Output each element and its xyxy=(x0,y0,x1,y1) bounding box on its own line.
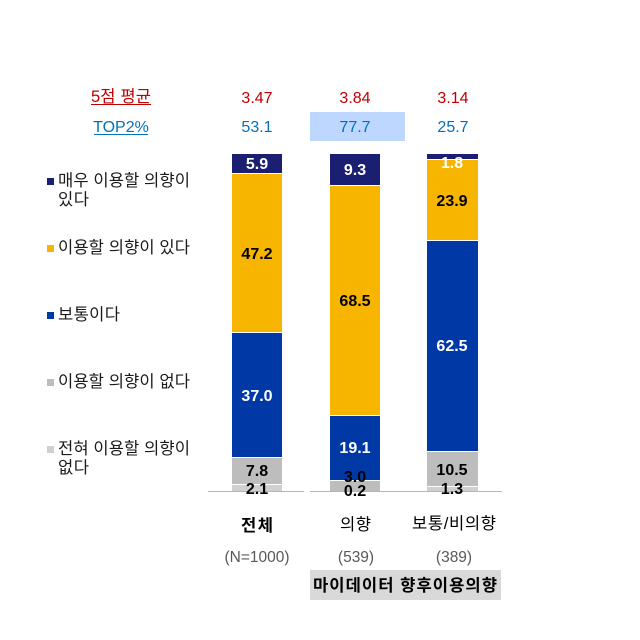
stacked bar: neutral/no intent: 1.8 xyxy=(441,155,463,172)
sample sizes xyxy=(224,549,472,566)
stacked bar: intent xyxy=(330,154,380,500)
category labels: 전체 xyxy=(241,516,273,535)
row: 5-point average xyxy=(91,87,469,107)
legend item: strongly intend: 있다 xyxy=(58,190,89,209)
stacked bar: overall: 47.2 xyxy=(241,246,273,263)
legend item: do not intend: 이용할 의향이 없다 xyxy=(58,372,190,391)
stacked bar: overall xyxy=(232,154,282,498)
stacked bar: intent: 0.2 xyxy=(344,483,366,500)
legend xyxy=(47,171,190,477)
label: 5-point average: 5점 평균 xyxy=(91,87,151,106)
stacked bar: neutral/no intent xyxy=(427,154,478,498)
legend item: strongly intend: 매우 이용할 의향이 xyxy=(58,171,190,190)
stacked bar: overall: 5.9 xyxy=(246,156,268,173)
value: overall average: 3.47 xyxy=(241,90,273,107)
row: TOP2% xyxy=(93,112,469,141)
stacked bar: intent: 3.0 xyxy=(344,469,366,486)
value: overall TOP2: 53.1 xyxy=(241,119,273,136)
label: TOP2%: TOP2% xyxy=(93,119,149,136)
sample sizes: (N=1000) xyxy=(224,549,290,566)
legend item: neutral: 보통이다 xyxy=(58,305,120,324)
stacked bar: neutral/no intent: 62.5 xyxy=(436,338,468,355)
category labels xyxy=(241,514,496,535)
value: intent average: 3.84 xyxy=(339,90,371,107)
legend item: not at all: 없다 xyxy=(58,458,89,477)
legend item: not at all: 전혀 이용할 의향이 xyxy=(58,439,190,458)
legend item: strongly intend xyxy=(47,171,190,209)
stacked bar: neutral/no intent: 1.3 xyxy=(441,481,463,498)
value: neutral/no-intent TOP2: 25.7 xyxy=(437,119,469,136)
stacked bar: neutral/no intent: 10.5 xyxy=(436,462,468,479)
stacked bar: neutral/no intent: 23.9 xyxy=(436,193,468,210)
sample sizes: (539) xyxy=(338,549,374,566)
value: intent TOP2: 77.7 xyxy=(339,119,371,136)
stacked bar: intent: 68.5 xyxy=(339,293,371,310)
stacked bar: overall: 2.1 xyxy=(246,481,268,498)
stacked bar: overall: 37.0 xyxy=(241,388,273,405)
value: neutral/no-intent average: 3.14 xyxy=(437,90,469,107)
highlight: intent TOP2 xyxy=(310,112,405,141)
sample sizes: (389) xyxy=(436,549,472,566)
legend item: intend: 이용할 의향이 있다 xyxy=(58,238,190,257)
group label: MyData future use intent xyxy=(310,570,501,600)
stacked bar: intent: 19.1 xyxy=(339,440,371,457)
category labels: 보통/비의향 xyxy=(412,514,496,533)
category labels: 의향 xyxy=(340,515,371,534)
stacked bar: intent: 9.3 xyxy=(344,162,366,179)
group label: MyData future use intent: 마이데이터 향후이용의향 xyxy=(313,576,497,595)
stacked bar: overall: 7.8 xyxy=(246,463,268,480)
legend item: not at all xyxy=(47,439,190,477)
